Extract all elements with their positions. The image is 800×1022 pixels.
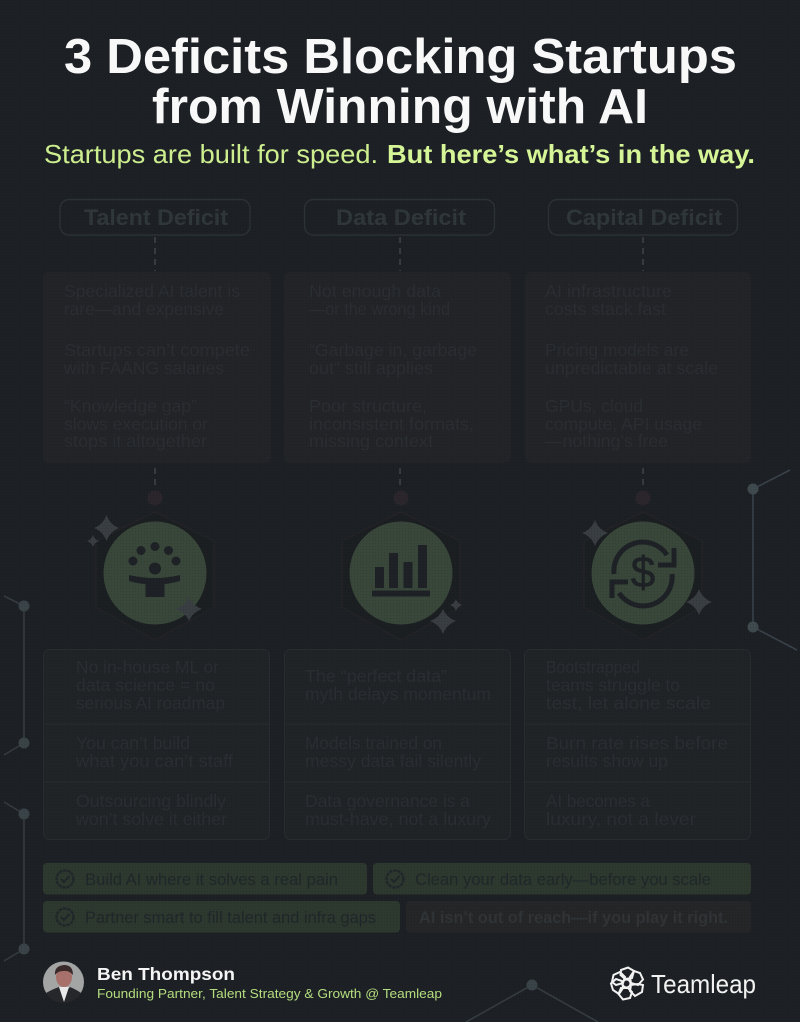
panel: talent impacts: data science = no (76, 675, 215, 695)
chip: build AI: Build AI where it solves a real pain (85, 871, 338, 889)
panel: talent problems (43, 272, 271, 463)
panel: data impacts: The “perfect data” (305, 666, 447, 686)
network lines: bottom (466, 980, 598, 1022)
heading: Talent Deficit (60, 200, 250, 235)
subtitle (44, 139, 755, 169)
panel: talent problems: rare—and expensive (64, 299, 224, 319)
panel: capital impacts (524, 650, 750, 840)
chip: clean data (373, 863, 751, 894)
subtitle: But here’s what’s in the way. (387, 139, 755, 169)
panel: data problems: —or the wrong kind (309, 299, 450, 319)
panel: talent impacts: No in-house ML or (76, 657, 219, 677)
network lines: right (748, 470, 797, 650)
panel: capital problems: compute, API usage (545, 414, 702, 434)
icon: data (342, 512, 462, 640)
panel: talent impacts: won’t solve it either (75, 809, 227, 829)
heading: Capital Deficit: Capital Deficit (566, 205, 723, 230)
panel: data problems (284, 272, 511, 463)
panel: talent problems: “Knowledge gap” (64, 396, 197, 416)
panel: capital impacts: test, let alone scale (546, 693, 711, 713)
panel: talent problems: slows execution or (64, 414, 208, 434)
author name and role: Founding Partner, Talent Strategy & Growth @ Teamleap (97, 986, 442, 1001)
panel: capital problems: costs stack fast (545, 299, 666, 319)
panel: capital impacts: teams struggle to (546, 675, 680, 695)
heading: Data Deficit (304, 200, 494, 235)
chip: build AI (43, 863, 367, 894)
heading: Capital Deficit (548, 200, 738, 235)
panel: capital impacts: luxury, not a lever (546, 809, 696, 829)
panel: talent impacts: You can’t build (76, 733, 190, 753)
chip: closing statement (406, 901, 751, 932)
panel: data impacts: Models trained on (305, 733, 442, 753)
panel: capital problems (525, 272, 751, 463)
panel: data impacts: Data governance is a (305, 791, 470, 811)
panel: data impacts (284, 650, 510, 840)
panel: data impacts: myth delays momentum (305, 684, 491, 704)
chip: partner smart (43, 901, 400, 932)
network lines: left upper (4, 596, 30, 755)
author name and role: Ben Thompson (97, 964, 235, 984)
panel: data problems: missing context (309, 431, 433, 451)
panel: data impacts: messy data fail silently (305, 751, 481, 771)
network lines: left lower (4, 802, 30, 961)
panel: capital impacts: Bootstrapped (546, 657, 640, 677)
panel: talent impacts (44, 650, 270, 840)
panel: talent problems: with FAANG salaries (63, 358, 224, 378)
logo: Teamleap (611, 968, 756, 1000)
icon: talent (87, 512, 214, 640)
panel: talent problems: Specialized AI talent is (64, 281, 240, 301)
panel: capital impacts: Burn rate rises before (546, 733, 728, 753)
panel: capital problems: unpredictable at scale (545, 358, 718, 378)
panel: data impacts: must-have, not a luxury (305, 809, 491, 829)
dashed connectors upper (155, 237, 643, 271)
panel: talent impacts: serious AI roadmap (76, 693, 225, 713)
panel: capital problems: Pricing models are (545, 340, 689, 360)
panel: capital impacts: results show up (546, 751, 668, 771)
icon: capital: $ (631, 548, 655, 597)
panel: talent problems: Startups can’t compete (64, 340, 250, 360)
author name and role (97, 964, 442, 1001)
chip: clean data: Clean your data early—before you scale (415, 871, 711, 889)
title (64, 30, 737, 134)
panel: data problems: out” still applies (309, 358, 433, 378)
chip: closing statement: AI isn’t out of reach—if you play it right. (419, 909, 728, 927)
subtitle: Startups are built for speed. (44, 139, 378, 169)
avatar: Ben Thompson (43, 962, 84, 1003)
title: 3 Deficits Blocking Startups (64, 30, 737, 84)
panel: data problems: Not enough data (309, 281, 441, 301)
panel: capital problems: GPUs, cloud (545, 396, 643, 416)
panel: capital impacts: AI becomes a (546, 791, 650, 811)
heading: Data Deficit: Data Deficit (336, 205, 467, 230)
title: from Winning with AI (152, 80, 648, 134)
panel: data problems: inconsistent formats, (309, 414, 474, 434)
panel: talent impacts: what you can’t staff (75, 751, 233, 771)
icon: capital (582, 512, 712, 640)
chip: partner smart: Partner smart to fill talent and infra gaps (85, 909, 376, 927)
panel: talent problems: stops it altogether (64, 431, 207, 451)
panel: data problems: “Garbage in, garbage (309, 340, 477, 360)
dashed connectors lower with nodes (148, 468, 650, 506)
logo: Teamleap: Teamleap (651, 969, 756, 999)
panel: capital problems: —nothing’s free (545, 431, 668, 451)
panel: talent impacts: Outsourcing blindly (76, 791, 226, 811)
heading: Talent Deficit: Talent Deficit (84, 205, 229, 230)
panel: data problems: Poor structure, (309, 396, 427, 416)
panel: capital problems: AI infrastructure (545, 281, 672, 301)
